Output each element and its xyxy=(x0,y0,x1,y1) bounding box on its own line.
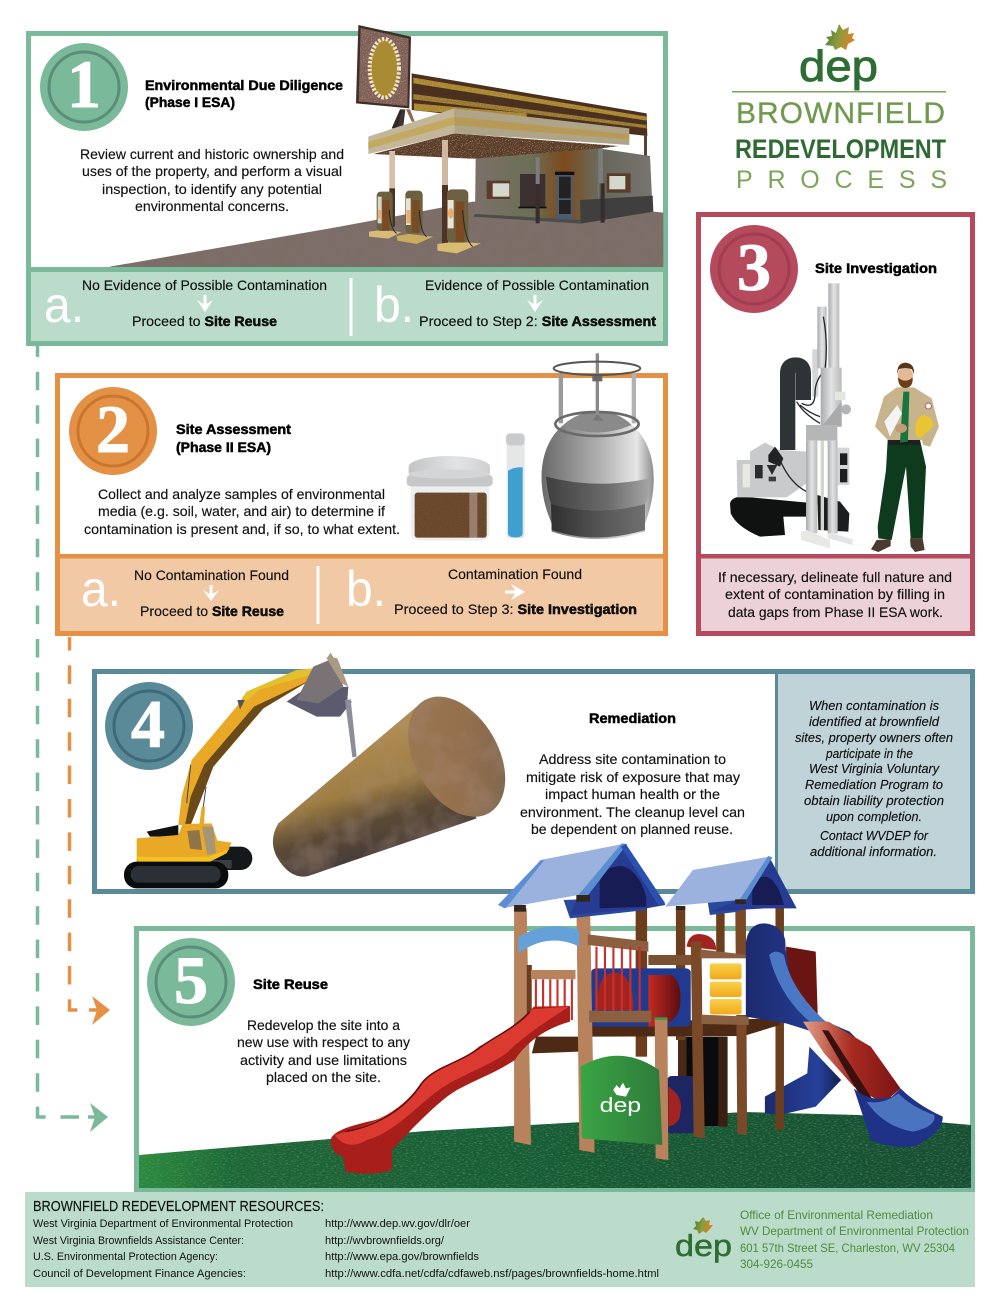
panel 4: remediation xyxy=(94,653,972,892)
side note box: sites, property owners often xyxy=(795,731,953,745)
option a: Proceed to Site Reuse xyxy=(140,603,284,619)
option b: Proceed to Step 2: Site Assessment xyxy=(419,313,656,329)
resource links: http://wvbrownfields.org/ xyxy=(325,1235,445,1247)
blue slide tube xyxy=(746,923,864,1047)
icon: maple leaf xyxy=(825,24,855,50)
option a: a. xyxy=(81,561,121,617)
badge 5: 5 xyxy=(174,942,208,1018)
resources heading: BROWNFIELD REDEVELOPMENT RESOURCES: xyxy=(33,1199,324,1215)
illustration: drill rig xyxy=(730,283,853,548)
header logo xyxy=(732,24,947,194)
description band xyxy=(701,558,970,631)
resource names: U.S. Environmental Protection Agency: xyxy=(33,1251,218,1263)
illustration: gas station xyxy=(110,25,663,267)
illustration: inspector xyxy=(871,363,939,552)
contact details: WV Department of Environmental Protection xyxy=(740,1224,969,1238)
arrow down xyxy=(527,295,543,312)
side note box: Remediation Program to xyxy=(805,778,943,792)
heading: Site Investigation xyxy=(815,260,937,276)
badge 2: 2 xyxy=(96,391,130,467)
side note box xyxy=(775,674,970,889)
outcome band xyxy=(60,558,663,631)
illustration: sample jar, vial and tank xyxy=(407,353,654,541)
resource names: West Virginia Brownfields Assistance Center: xyxy=(33,1235,244,1247)
dep wordmark: dep xyxy=(799,42,878,91)
description: data gaps from Phase II ESA work. xyxy=(728,604,943,620)
sign logo: dep xyxy=(600,1094,641,1116)
option a xyxy=(44,277,327,333)
heading: Site Assessment xyxy=(176,421,291,437)
description xyxy=(80,146,344,214)
contact details: 601 57th Street SE, Charleston, WV 25304 xyxy=(740,1241,955,1255)
illustration: grass xyxy=(139,1112,971,1188)
description: activity and use limitations xyxy=(240,1052,407,1068)
option b: Proceed to Step 3: Site Investigation xyxy=(394,601,637,617)
description: If necessary, delineate full nature and xyxy=(718,569,952,585)
description: placed on the site. xyxy=(266,1069,381,1085)
panel 1: environmental due diligence xyxy=(28,25,666,344)
panel 2: site assessment xyxy=(58,353,666,634)
option a: Proceed to Site Reuse xyxy=(132,313,277,329)
side note box: identified at brownfield xyxy=(809,715,940,729)
description: Collect and analyze samples of environmental xyxy=(98,486,385,502)
description: Redevelop the site into a xyxy=(247,1017,400,1033)
description: uses of the property, and perform a visual xyxy=(82,163,342,179)
description: Address site contamination to xyxy=(539,751,726,767)
heading: Remediation xyxy=(589,710,676,726)
illustration: playground xyxy=(331,843,943,1174)
brownfield: BROWNFIELD xyxy=(736,97,945,130)
badge 3: 3 xyxy=(737,229,771,305)
description: environment. The cleanup level can xyxy=(520,804,745,820)
heading: (Phase II ESA) xyxy=(176,439,271,455)
badge 2 xyxy=(69,387,157,475)
redevelopment: REDEVELOPMENT xyxy=(735,134,946,164)
description xyxy=(718,569,952,620)
description: Review current and historic ownership and xyxy=(80,146,344,162)
badge 1 xyxy=(40,43,128,131)
monitoring tank xyxy=(542,353,654,539)
description: media (e.g. soil, water, and air) to determine if xyxy=(98,503,385,519)
option a: a. xyxy=(44,277,84,333)
divider xyxy=(316,566,320,624)
red slide xyxy=(331,1006,570,1174)
side note box: participate in the xyxy=(825,747,913,761)
footer logo xyxy=(675,1217,732,1263)
description: be dependent on planned reuse. xyxy=(531,821,733,837)
badge 4 xyxy=(105,682,193,770)
illustration: contaminated pipe xyxy=(273,680,525,877)
heading: Site Reuse xyxy=(253,976,328,992)
heading: Environmental Due Diligence xyxy=(145,77,343,93)
badge 3 xyxy=(710,225,798,313)
resource links: http://www.epa.gov/brownfields xyxy=(325,1251,480,1263)
illustration: excavator xyxy=(124,653,357,888)
side note box: obtain liability protection xyxy=(804,794,944,808)
resource links: http://www.dep.wv.gov/dlr/oer xyxy=(325,1218,470,1230)
option b: Contamination Found xyxy=(448,566,582,582)
arrow down xyxy=(197,295,213,312)
option b: Evidence of Possible Contamination xyxy=(425,277,649,293)
process: PROCESS xyxy=(736,166,947,194)
contact details xyxy=(740,1208,969,1271)
description: environmental concerns. xyxy=(135,198,289,214)
option b: b. xyxy=(374,277,414,333)
badge 1: 1 xyxy=(67,46,101,122)
side note box: Contact WVDEP for xyxy=(820,829,929,843)
description: extent of contamination by filling in xyxy=(725,586,945,602)
description xyxy=(84,486,400,537)
resource links xyxy=(325,1218,659,1280)
panel 5: site reuse xyxy=(136,843,972,1190)
dashed green path to site reuse xyxy=(38,346,108,1132)
arrow right xyxy=(505,584,525,600)
option b: b. xyxy=(346,561,386,617)
resource links: http://www.cdfa.net/cdfa/cdfaweb.nsf/pages/brownfields-home.html xyxy=(325,1268,659,1280)
roofs xyxy=(564,897,646,918)
heading xyxy=(176,421,291,455)
outcome band xyxy=(31,272,663,341)
contact details: 304-926-0455 xyxy=(740,1257,813,1271)
sample vial xyxy=(506,433,525,538)
badge 5 xyxy=(147,938,235,1026)
contact details: Office of Environmental Remediation xyxy=(740,1208,933,1222)
option a: No Contamination Found xyxy=(134,567,289,583)
option b xyxy=(346,561,637,617)
side note box: When contamination is xyxy=(809,699,939,713)
badge 4: 4 xyxy=(131,686,165,762)
resource names xyxy=(33,1218,293,1280)
arrow down xyxy=(203,585,219,601)
description: inspection, to identify any potential xyxy=(102,181,322,197)
side note box: additional information. xyxy=(810,845,937,859)
description: mitigate risk of exposure that may xyxy=(526,769,740,785)
side note box: West Virginia Voluntary xyxy=(809,762,940,776)
heading xyxy=(145,77,343,110)
dashed orange path to site reuse xyxy=(70,637,110,1025)
resource names: West Virginia Department of Environmental Protection xyxy=(33,1218,293,1230)
soil jar xyxy=(407,456,493,541)
side note box: upon completion. xyxy=(826,810,922,824)
description xyxy=(520,751,745,837)
resource names: Council of Development Finance Agencies: xyxy=(33,1268,246,1280)
option a: No Evidence of Possible Contamination xyxy=(82,277,327,293)
footer: resources xyxy=(25,1192,975,1287)
description: contamination is present and, if so, to what extent. xyxy=(84,521,400,537)
description: new use with respect to any xyxy=(237,1034,410,1050)
description: impact human health or the xyxy=(545,786,720,802)
option b xyxy=(374,277,656,333)
description xyxy=(237,1017,410,1085)
red slide chute xyxy=(803,1022,900,1103)
panel 3: site investigation xyxy=(698,214,972,634)
heading: (Phase I ESA) xyxy=(145,94,235,110)
footer logo: dep xyxy=(675,1228,732,1263)
option a xyxy=(81,561,289,619)
divider xyxy=(350,278,352,336)
